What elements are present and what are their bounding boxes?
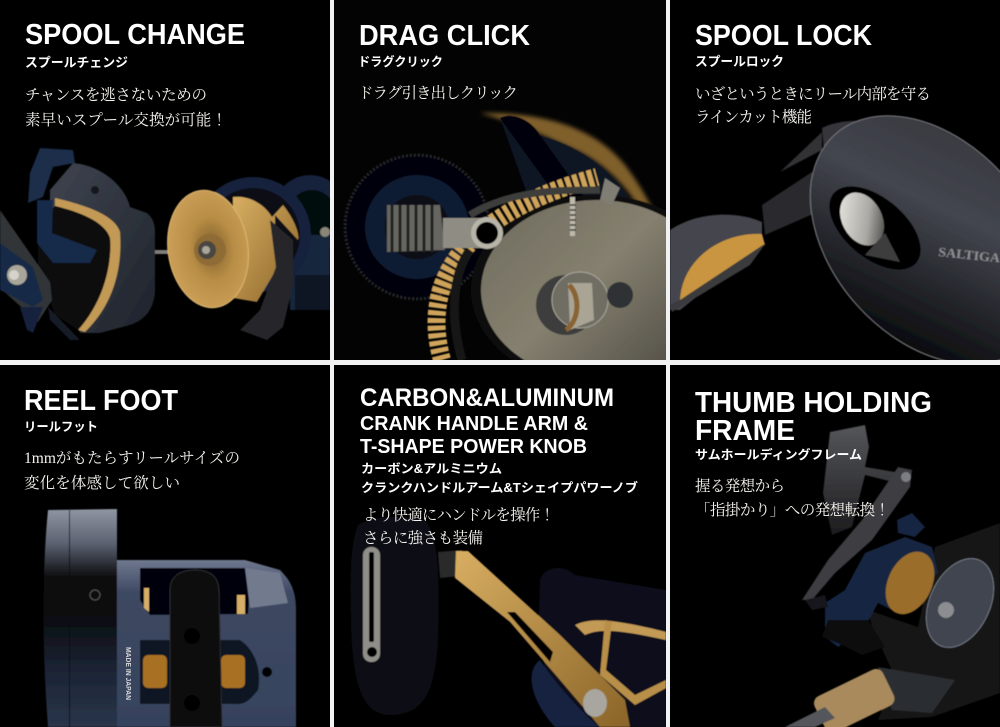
subtitle: drag click: ドラグクリック — [358, 54, 443, 69]
heading: thumb holding frame: FRAME — [695, 415, 795, 447]
description: carbon and aluminum: さらに強さも装備 — [363, 529, 483, 547]
label: made in japan: MADE IN JAPAN — [124, 647, 131, 700]
description: spool change: チャンスを逃さないための — [25, 86, 207, 104]
subtitle: reel foot: リールフット — [24, 420, 98, 434]
description: spool change: 素早いスプール交換が可能！ — [25, 111, 227, 129]
description: thumb holding frame — [695, 478, 884, 517]
description: reel foot — [24, 449, 240, 492]
description: thumb holding frame: 握る発想から — [695, 476, 785, 495]
panel: carbon and aluminum handle — [334, 365, 666, 727]
panel: spool change — [0, 0, 348, 360]
panel: drag click — [334, 0, 666, 360]
description: thumb holding frame: 「指掛かり」への発想転換！ — [695, 500, 890, 519]
illustration: reel with spool removed — [0, 148, 348, 340]
illustration: drag gear — [343, 110, 666, 360]
description: spool lock: ラインカット機能 — [695, 108, 812, 126]
description: drag click: ドラグ引き出しクリック — [358, 84, 518, 102]
heading: carbon and aluminum: CRANK HANDLE ARM & — [360, 413, 588, 435]
panel: spool lock — [670, 0, 1000, 360]
description: spool lock: いざというときにリール内部を守る — [695, 85, 931, 103]
illustration: handle knob and arm — [351, 517, 666, 727]
description: reel foot: 変化を体感して欲しい — [24, 473, 180, 492]
description: carbon and aluminum — [365, 506, 548, 545]
heading: spool change: SPOOL CHANGE — [25, 19, 245, 51]
heading: thumb holding frame: THUMB HOLDING — [695, 387, 932, 419]
description: spool lock — [695, 85, 931, 126]
subtitle: carbon and aluminum: カーボン&アルミニウム — [361, 462, 502, 476]
description: spool change — [25, 86, 227, 129]
heading: drag click: DRAG CLICK — [359, 20, 530, 52]
subtitle: carbon and aluminum: クランクハンドルアーム&Tシェイプパワーノブ — [361, 480, 639, 495]
heading: reel foot: REEL FOOT — [24, 385, 178, 417]
heading: carbon and aluminum — [360, 388, 612, 453]
subtitle: spool lock: スプールロック — [695, 54, 784, 69]
label: cover engraving: SALTIGA — [938, 244, 1000, 266]
illustration: reel held in hand — [785, 425, 1000, 727]
heading: carbon and aluminum: CARBON&ALUMINUM — [360, 384, 614, 412]
far frame — [284, 174, 330, 249]
description: carbon and aluminum: より快適にハンドルを操作！ — [363, 505, 555, 524]
panel: thumb holding frame — [670, 365, 1000, 727]
heading: carbon and aluminum: T-SHAPE POWER KNOB — [360, 436, 587, 458]
subtitle: carbon and aluminum — [361, 462, 639, 495]
panel: reel foot — [0, 365, 330, 727]
heading: thumb holding frame — [695, 392, 930, 440]
heading: spool lock: SPOOL LOCK — [695, 20, 872, 52]
illustration: spool lock cover — [670, 114, 1000, 360]
description: reel foot: 1mmがもたらすリールサイズの — [24, 449, 240, 467]
illustration: reel side view — [44, 509, 296, 727]
subtitle: spool change: スプールチェンジ — [25, 55, 128, 70]
subtitle: thumb holding frame: サムホールディングフレーム — [695, 447, 862, 462]
